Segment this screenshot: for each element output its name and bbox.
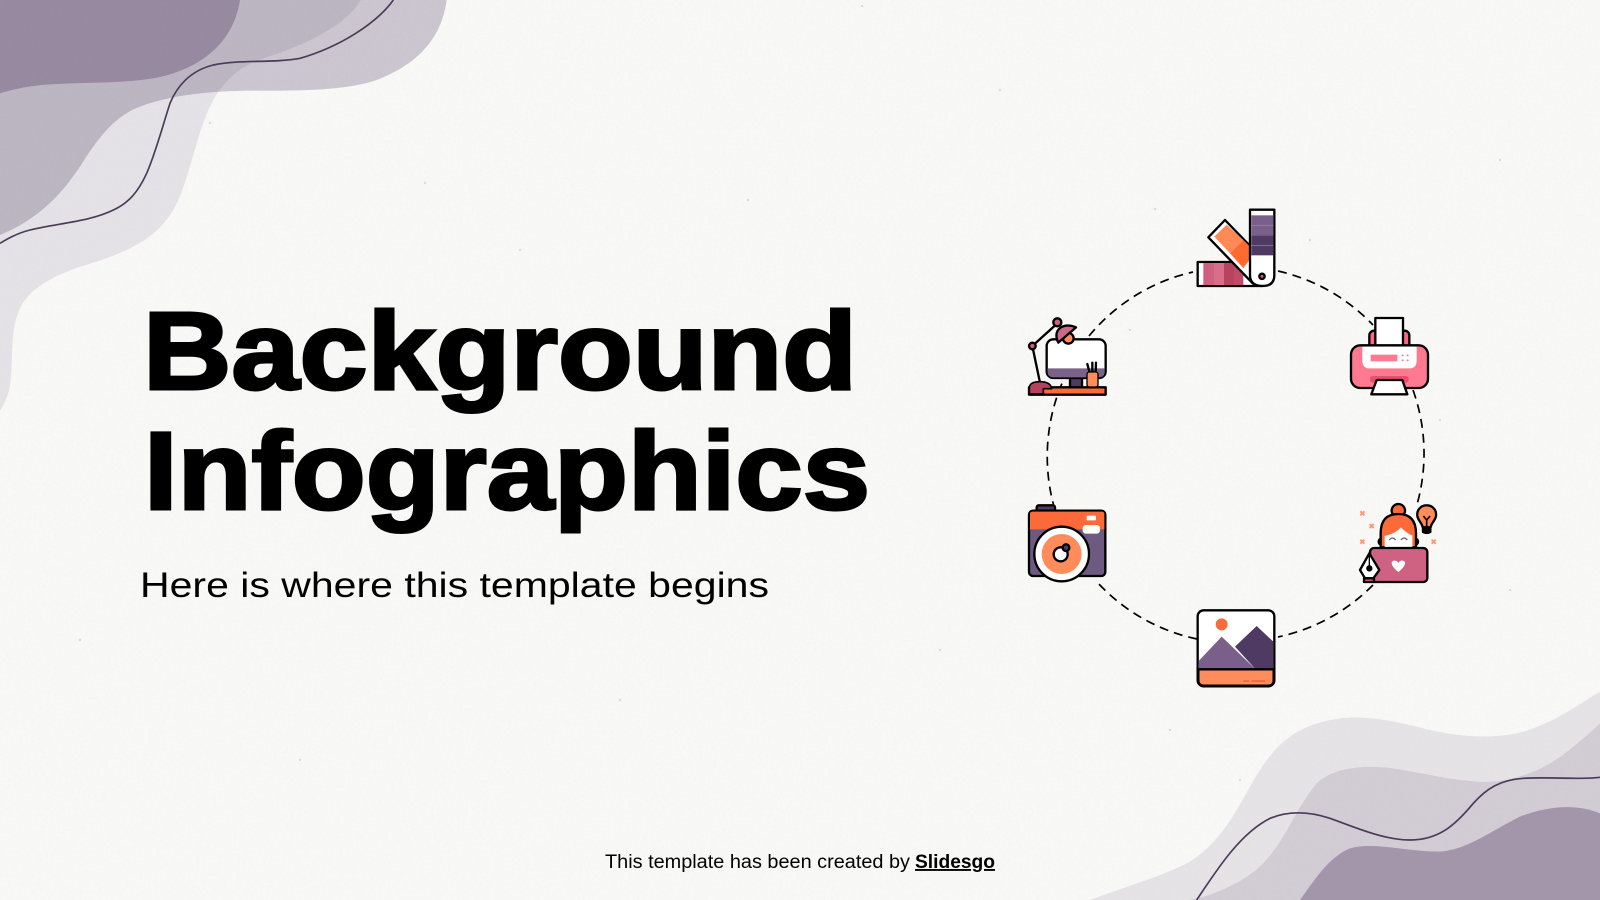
title [143, 290, 870, 533]
icon: printer [1351, 318, 1428, 394]
icon: desk with computer and lamp [1029, 318, 1106, 395]
decoration: top-left blobs [0, 0, 447, 411]
dashed ring [1047, 271, 1424, 639]
icon: picture frame [1198, 610, 1274, 686]
decoration: bottom-right blobs [1090, 692, 1600, 900]
icon: camera [1029, 505, 1105, 581]
subtitle: Here is where this template begins [140, 566, 769, 605]
title: Infographics [144, 410, 870, 533]
footer credit: This template has been created by [605, 852, 911, 873]
icon: designer with laptop, pen and bulb [1360, 504, 1436, 582]
footer credit: Slidesgo [915, 852, 995, 873]
title: Background [143, 290, 857, 413]
icon: colour swatches [1198, 210, 1274, 286]
